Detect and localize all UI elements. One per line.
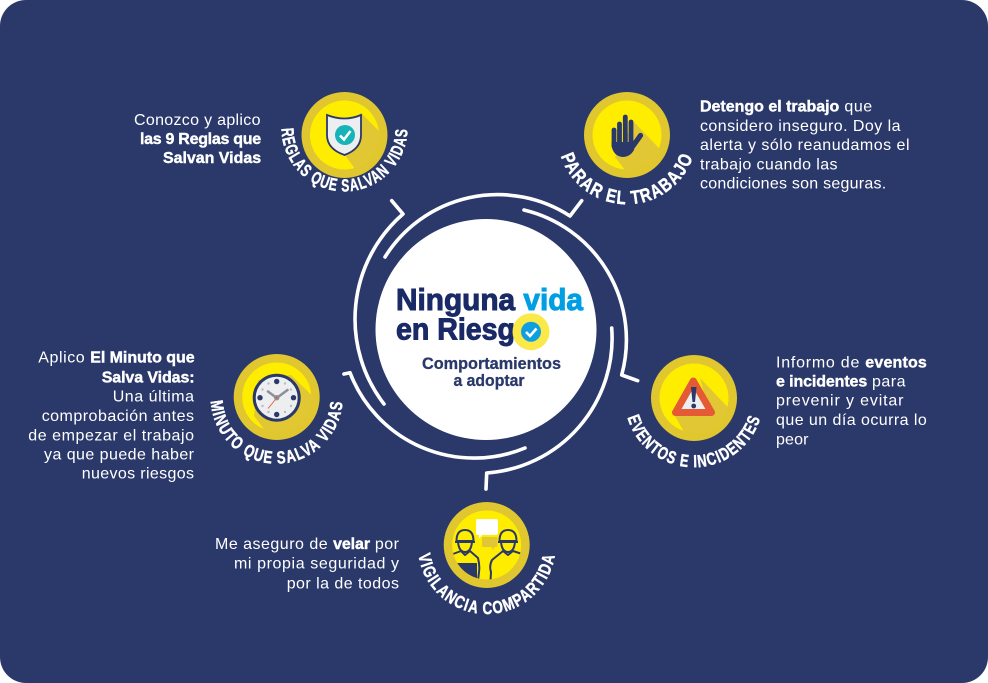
text: parar: alerta y sólo reanudamos el bbox=[700, 137, 910, 154]
subtitle: Comportamientos bbox=[422, 354, 561, 373]
icon: shield bbox=[327, 115, 361, 155]
text: minuto: de empezar el trabajo bbox=[28, 427, 194, 444]
text: reglas: Conozco y aplico bbox=[134, 112, 261, 129]
text: parar: Detengo el trabajo que bbox=[700, 98, 873, 116]
text: reglas: las 9 Reglas que bbox=[140, 131, 261, 148]
title: en Riesg bbox=[396, 312, 515, 346]
subtitle bbox=[422, 354, 561, 390]
title: Ninguna vida bbox=[396, 282, 584, 317]
badge: parar el trabajo bbox=[560, 92, 692, 205]
text: minuto: Una última bbox=[113, 389, 194, 406]
text: reglas bbox=[134, 112, 261, 167]
text: vigilancia: por la de todos bbox=[287, 575, 400, 592]
label: REGLAS QUE SALVAN VIDAS bbox=[281, 128, 408, 192]
text: minuto: nuevos riesgos bbox=[82, 466, 194, 482]
text: eventos: e incidentes para bbox=[776, 374, 906, 390]
badge: reglas que salvan vidas bbox=[281, 92, 408, 192]
text: reglas: Salvan Vidas bbox=[163, 150, 261, 167]
text: minuto: comprobación antes bbox=[42, 408, 194, 425]
text: minuto: Salva Vidas: bbox=[102, 369, 194, 386]
label: VIGILANCIA COMPARTIDA bbox=[418, 552, 556, 614]
label: MINUTO QUE SALVA VIDAS bbox=[210, 400, 342, 464]
text: eventos: Informo de eventos bbox=[776, 354, 927, 372]
subtitle: a adoptar bbox=[454, 371, 525, 390]
central ring arrows bbox=[344, 195, 638, 489]
label: PARAR EL TRABAJO bbox=[560, 152, 692, 205]
text: eventos: prevenir y evitar bbox=[776, 393, 904, 410]
icon: hand bbox=[612, 117, 640, 157]
text: vigilancia: mi propia seguridad y bbox=[234, 556, 400, 572]
text: eventos: peor bbox=[776, 431, 809, 448]
logo check badge bbox=[512, 313, 550, 350]
text: parar: considero inseguro. Doy la bbox=[700, 118, 901, 135]
text: vigilancia bbox=[215, 536, 400, 592]
text: minuto: Aplico El Minuto que bbox=[38, 350, 195, 367]
text: parar bbox=[700, 98, 910, 192]
text: eventos bbox=[776, 354, 927, 448]
text: vigilancia: Me aseguro de velar por bbox=[215, 536, 400, 553]
title bbox=[396, 282, 584, 346]
icon: workers and speech bubbles bbox=[453, 519, 522, 583]
text: eventos: que un día ocurra lo bbox=[776, 412, 927, 429]
label: EVENTOS E INCIDENTES bbox=[627, 414, 760, 468]
badge: minuto que salva vidas bbox=[210, 354, 342, 464]
text: minuto bbox=[28, 350, 195, 482]
text: minuto: ya que puede haber bbox=[44, 446, 195, 464]
badge: eventos e incidentes bbox=[627, 355, 760, 468]
text: parar: trabajo cuando las bbox=[700, 156, 838, 174]
icon: warning triangle bbox=[676, 381, 712, 412]
badge: vigilancia compartida bbox=[418, 502, 556, 614]
text: parar: condiciones son seguras. bbox=[700, 176, 887, 192]
icon: clock bbox=[254, 375, 299, 420]
central logo circle bbox=[376, 219, 596, 440]
